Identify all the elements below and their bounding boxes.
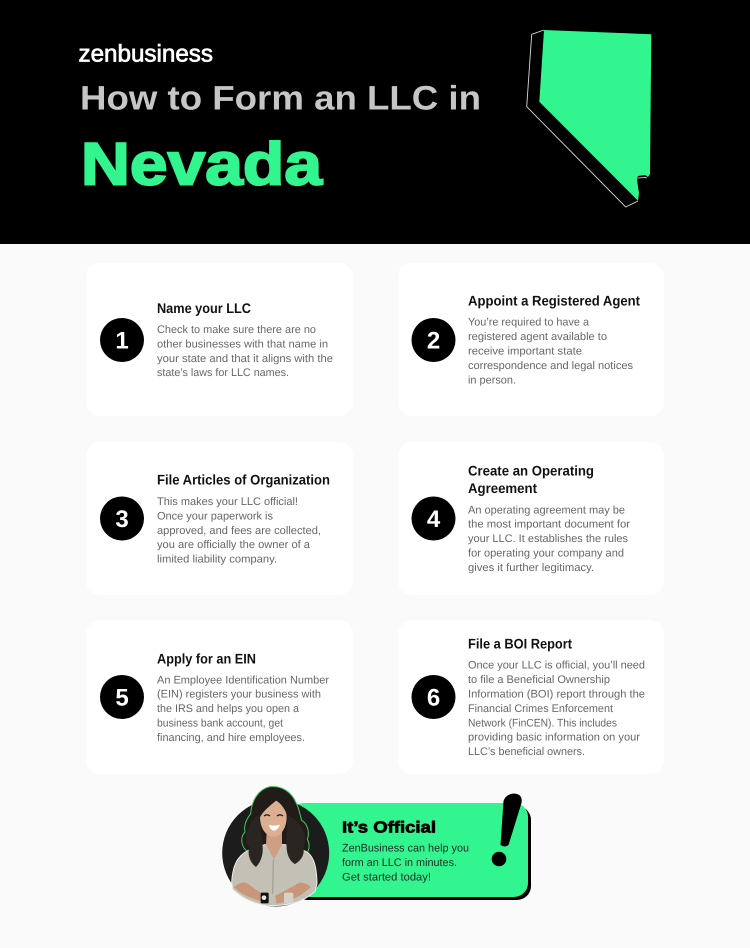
panel: step 3: This makes your LLC official! xyxy=(157,496,298,508)
panel: step 1: your state and that it aligns with the xyxy=(157,353,333,365)
panel: step 4: gives it further legitimacy. xyxy=(468,562,594,574)
icon: exclamation mark xyxy=(492,794,522,866)
panel: step 4: An operating agreement may be xyxy=(468,504,625,516)
panel: step 2: registered agent available to xyxy=(468,331,607,343)
panel: step 6: Information (BOI) report through the xyxy=(468,688,645,700)
panel: step 1 xyxy=(86,263,353,416)
panel: step 6: to file a Beneficial Ownership xyxy=(468,674,610,686)
panel: step 5: 5 xyxy=(115,684,129,712)
panel: step 4: your LLC. It establishes the rules xyxy=(468,533,628,545)
panel: step 5: business bank account, get xyxy=(157,718,283,730)
panel: step 6: Once your LLC is official, you’ll need xyxy=(468,660,645,672)
panel: step 1: other businesses with that name in xyxy=(157,338,328,350)
title: state name: Nevada xyxy=(81,130,323,197)
panel: step 1: Check to make sure there are no xyxy=(157,324,316,336)
panel: step 3 xyxy=(86,442,353,595)
panel: step 1: Name your LLC xyxy=(157,300,251,316)
callout text: ZenBusiness can help you xyxy=(342,843,469,855)
callout heading: It’s Official xyxy=(342,820,436,837)
panel: step 3: 3 xyxy=(115,506,129,533)
panel: step 5: the IRS and helps you open a xyxy=(157,703,300,715)
panel: step 4: Create an Operating xyxy=(468,463,594,479)
panel: step 1: state’s laws for LLC names. xyxy=(157,367,289,379)
panel: step 4: Agreement xyxy=(468,480,537,496)
panel: step 2: You’re required to have a xyxy=(468,317,590,329)
logo: zenbusiness: zenbusiness xyxy=(78,41,213,68)
portrait: smiling woman xyxy=(222,786,329,906)
panel: step 2: receive important state xyxy=(468,346,582,358)
panel: step 1: 1 xyxy=(115,328,129,354)
panel: step 3: File Articles of Organization xyxy=(157,472,330,488)
callout text: form an LLC in minutes. xyxy=(342,857,457,869)
panel: step 3: limited liability company. xyxy=(157,554,277,566)
panel: step 6: 6 xyxy=(427,684,440,712)
callout: it's official xyxy=(222,786,531,906)
header band xyxy=(0,0,750,244)
callout text xyxy=(342,843,469,884)
panel: step 5: financing, and hire employees. xyxy=(157,732,305,744)
panel: step 6 xyxy=(398,620,664,774)
panel: step 3: Once your paperwork is xyxy=(157,510,273,522)
callout text: Get started today! xyxy=(342,872,431,884)
icon: Nevada state map xyxy=(527,30,651,207)
panel: step 2 xyxy=(398,263,664,416)
panel: step 4: for operating your company and xyxy=(468,548,624,560)
panel: step 2: Appoint a Registered Agent xyxy=(468,293,640,309)
panel: step 2: in person. xyxy=(468,374,516,386)
panel: step 2: correspondence and legal notices xyxy=(468,360,633,372)
panel: step 5: An Employee Identification Number xyxy=(157,674,329,686)
title: how to form: How to Form an LLC in xyxy=(80,79,481,117)
panel: step 4: 4 xyxy=(427,506,441,533)
panel: step 6: LLC’s beneficial owners. xyxy=(468,746,585,758)
panel: step 6: providing basic information on your xyxy=(468,732,640,744)
panel: step 5: Apply for an EIN xyxy=(157,650,256,666)
panel: step 6: File a BOI Report xyxy=(468,636,572,652)
panel: step 2: 2 xyxy=(427,328,440,354)
panel: step 4: the most important document for xyxy=(468,519,630,531)
panel: step 5: (EIN) registers your business with xyxy=(157,689,321,701)
panel: step 6: Financial Crimes Enforcement xyxy=(468,703,613,715)
panel: step 5 xyxy=(86,620,353,774)
panel: step 4 xyxy=(398,442,664,595)
panel: step 6: Network (FinCEN). This includes xyxy=(468,717,617,729)
panel: step 3: you are officially the owner of a xyxy=(157,539,311,551)
panel: step 3: approved, and fees are collected, xyxy=(157,525,321,537)
